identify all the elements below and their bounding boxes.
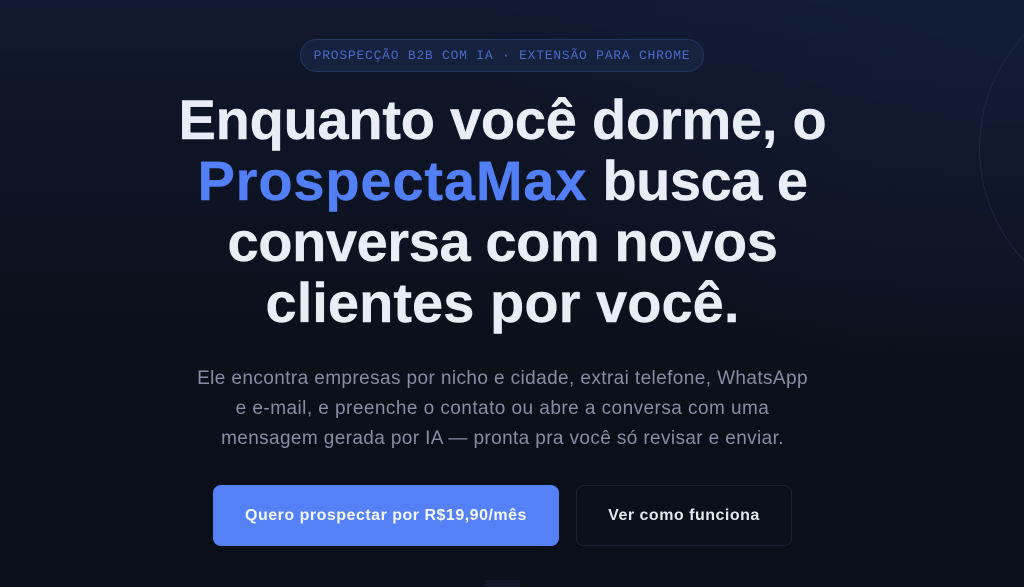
description paragraph: e e-mail, e preenche o contato ou abre a conversa com uma (236, 398, 769, 419)
primary button: Quero prospectar por R$19,90/mês (245, 507, 527, 524)
headline: Enquanto você dorme, o (179, 88, 826, 151)
description paragraph (197, 368, 808, 449)
headline: ProspectaMax busca e (197, 149, 808, 212)
headline (179, 88, 826, 334)
primary button (213, 485, 559, 546)
headline: conversa com novos (228, 210, 777, 273)
bottom cut-off element (485, 580, 520, 587)
secondary button: Ver como funciona (608, 507, 760, 524)
description paragraph: mensagem gerada por IA — pronta pra você só revisar e enviar. (221, 428, 784, 449)
headline: clientes por você. (266, 271, 739, 334)
decorative circle (979, 0, 1024, 313)
secondary button (576, 485, 792, 546)
description paragraph: Ele encontra empresas por nicho e cidade, extrai telefone, WhatsApp (197, 368, 808, 389)
badge: product category: PROSPECÇÃO B2B COM IA · EXTENSÃO PARA CHROME (314, 48, 690, 63)
badge: product category (300, 39, 704, 72)
